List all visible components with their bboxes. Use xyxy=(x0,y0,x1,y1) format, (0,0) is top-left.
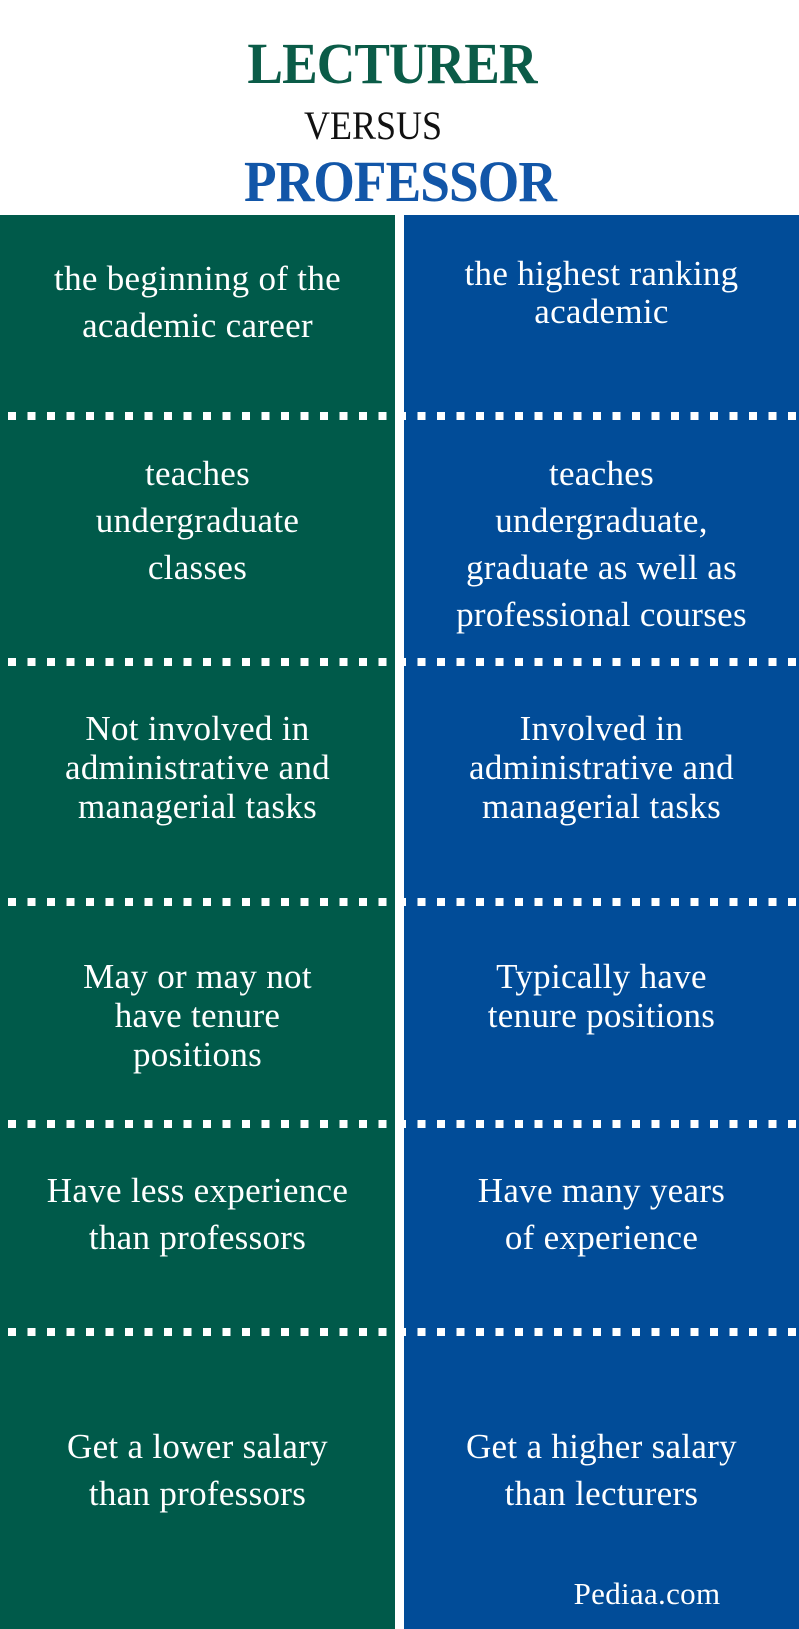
text: lecturer row 2: classes xyxy=(148,548,247,587)
text: professor row 5 xyxy=(478,1171,725,1257)
text: lecturer row 3: administrative and xyxy=(65,748,330,787)
text: professor row 2 xyxy=(456,454,747,634)
panel: lecturer column xyxy=(0,215,395,1629)
text: lecturer row 2: teaches xyxy=(145,454,250,493)
text: lecturer row 1: academic career xyxy=(82,306,313,345)
text: lecturer row 1 xyxy=(54,259,341,345)
text: lecturer row 3 xyxy=(65,709,330,826)
text: lecturer row 4: have tenure xyxy=(115,996,280,1035)
text: lecturer row 3: managerial tasks xyxy=(78,787,317,826)
text: lecturer row 4: positions xyxy=(133,1035,262,1074)
text: professor row 3: administrative and xyxy=(469,748,734,787)
text: lecturer row 3: Not involved in xyxy=(85,709,310,748)
text: lecturer row 5: Have less experience xyxy=(47,1171,348,1210)
text: professor row 3: managerial tasks xyxy=(482,787,721,826)
title xyxy=(244,31,558,214)
panel: professor column xyxy=(404,215,799,1629)
logo: pediaa.com: Pediaa.com xyxy=(574,1576,720,1611)
text: professor row 3: Involved in xyxy=(520,709,683,748)
text: professor row 3 xyxy=(469,709,734,826)
text: professor row 4: tenure positions xyxy=(488,996,715,1035)
text: professor row 5: Have many years xyxy=(478,1171,725,1210)
text: lecturer row 4 xyxy=(83,957,312,1074)
text: professor row 2: professional courses xyxy=(456,595,747,634)
text: professor row 4 xyxy=(488,957,715,1035)
heading: professor: PROFESSOR xyxy=(244,149,556,214)
text: professor row 2: graduate as well as xyxy=(466,548,737,587)
text: lecturer row 2 xyxy=(96,454,299,587)
text: lecturer row 2: undergraduate xyxy=(96,501,299,540)
text: professor row 5: of experience xyxy=(505,1218,698,1257)
text: professor row 6 xyxy=(466,1427,737,1513)
text: lecturer row 6: Get a lower salary xyxy=(67,1427,328,1466)
text: professor row 6: than lecturers xyxy=(505,1474,698,1513)
text: lecturer row 4: May or may not xyxy=(83,957,312,996)
text: lecturer row 5: than professors xyxy=(89,1218,306,1257)
text: lecturer row 1: the beginning of the xyxy=(54,259,341,298)
text: professor row 4: Typically have xyxy=(496,957,707,996)
text: professor row 1: the highest ranking xyxy=(464,254,738,293)
text: lecturer row 6: than professors xyxy=(89,1474,306,1513)
text: professor row 6: Get a higher salary xyxy=(466,1427,737,1466)
text: professor row 1: academic xyxy=(534,292,669,331)
text: professor row 1 xyxy=(464,254,738,331)
heading: lecturer: LECTURER xyxy=(247,31,537,96)
text: lecturer row 5 xyxy=(47,1171,348,1257)
text: lecturer row 6 xyxy=(67,1427,328,1513)
heading: versus: VERSUS xyxy=(304,103,442,148)
text: professor row 2: undergraduate, xyxy=(495,501,708,540)
text: professor row 2: teaches xyxy=(549,454,654,493)
